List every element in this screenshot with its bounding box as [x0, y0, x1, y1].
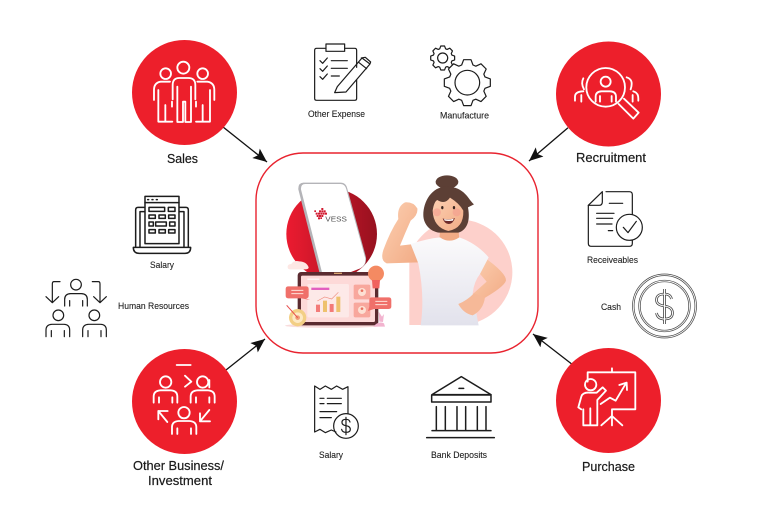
connector: purchase arrow	[533, 334, 572, 364]
illustration: smartphone with VESS logo	[298, 183, 366, 272]
node: purchase	[556, 348, 661, 453]
illustration: plant	[373, 312, 385, 327]
illustration: arm on hip	[470, 257, 506, 301]
label: salary bottom: Salary	[319, 450, 343, 460]
illustration: cloud	[288, 261, 309, 269]
icon: receipt with dollar	[315, 386, 358, 438]
connector: sales arrow	[223, 127, 267, 162]
illustration: VESS app and woman	[285, 175, 512, 328]
illustration: speech bubble right	[368, 297, 391, 311]
small gear	[431, 46, 455, 70]
label: cash: Cash	[601, 302, 621, 312]
label: other business investment: Investment	[148, 474, 213, 488]
label: salary top: Salary	[150, 260, 174, 270]
illustration: pink half circle	[409, 220, 512, 325]
node: other business / investment	[132, 349, 237, 454]
illustration: tablet dashboard	[285, 272, 382, 328]
icon: clipboard checklist	[315, 44, 371, 100]
connector: other business arrow	[226, 339, 265, 370]
illustration: raised arm	[382, 202, 418, 263]
label: manufacture: Manufacture	[440, 110, 489, 120]
label: receiveables: Receiveables	[587, 255, 638, 265]
label: human resources: Human Resources	[118, 301, 189, 311]
illustration: bun and hair	[423, 175, 474, 233]
label: other expense: Other Expense	[308, 109, 365, 119]
icon: magnifier over people	[575, 68, 639, 119]
icon: gears	[431, 46, 490, 106]
illustration: red circle behind phone	[286, 189, 377, 279]
icon: presenter with growth chart	[578, 368, 635, 425]
panel: central rounded frame	[256, 153, 538, 353]
label: sales: Sales	[167, 152, 198, 166]
illustration: neck	[439, 223, 459, 242]
node: recruitment	[556, 42, 661, 146]
icon: three people	[154, 62, 214, 122]
illustration: smile and eyes	[433, 206, 461, 224]
large gear	[444, 60, 490, 106]
illustration: white t-shirt	[411, 237, 489, 325]
label: purchase: Purchase	[582, 460, 635, 474]
icon: people exchange cycle	[154, 365, 215, 434]
illustration: smartphone with VESS logo: VESS	[325, 216, 347, 223]
label: other business investment: Other Business/	[133, 459, 225, 473]
illustration: hand on hip	[458, 293, 485, 315]
node: sales	[132, 40, 237, 145]
illustration: light bulb	[368, 266, 384, 288]
label: recruitment: Recruitment	[576, 151, 647, 165]
icon: bank building	[427, 377, 494, 438]
connector: recruitment arrow	[529, 128, 568, 161]
illustration: speech bubble left	[286, 286, 310, 300]
label: other business investment	[133, 459, 225, 488]
icon: document with check	[588, 192, 642, 246]
icon: laptop with calculator	[133, 196, 191, 253]
icon: human resources people and arrows	[46, 279, 106, 337]
illustration: dartboard target	[287, 305, 306, 326]
label: bank deposits: Bank Deposits	[431, 450, 487, 460]
illustration: face	[433, 198, 463, 231]
icon: dollar coin	[632, 274, 696, 338]
